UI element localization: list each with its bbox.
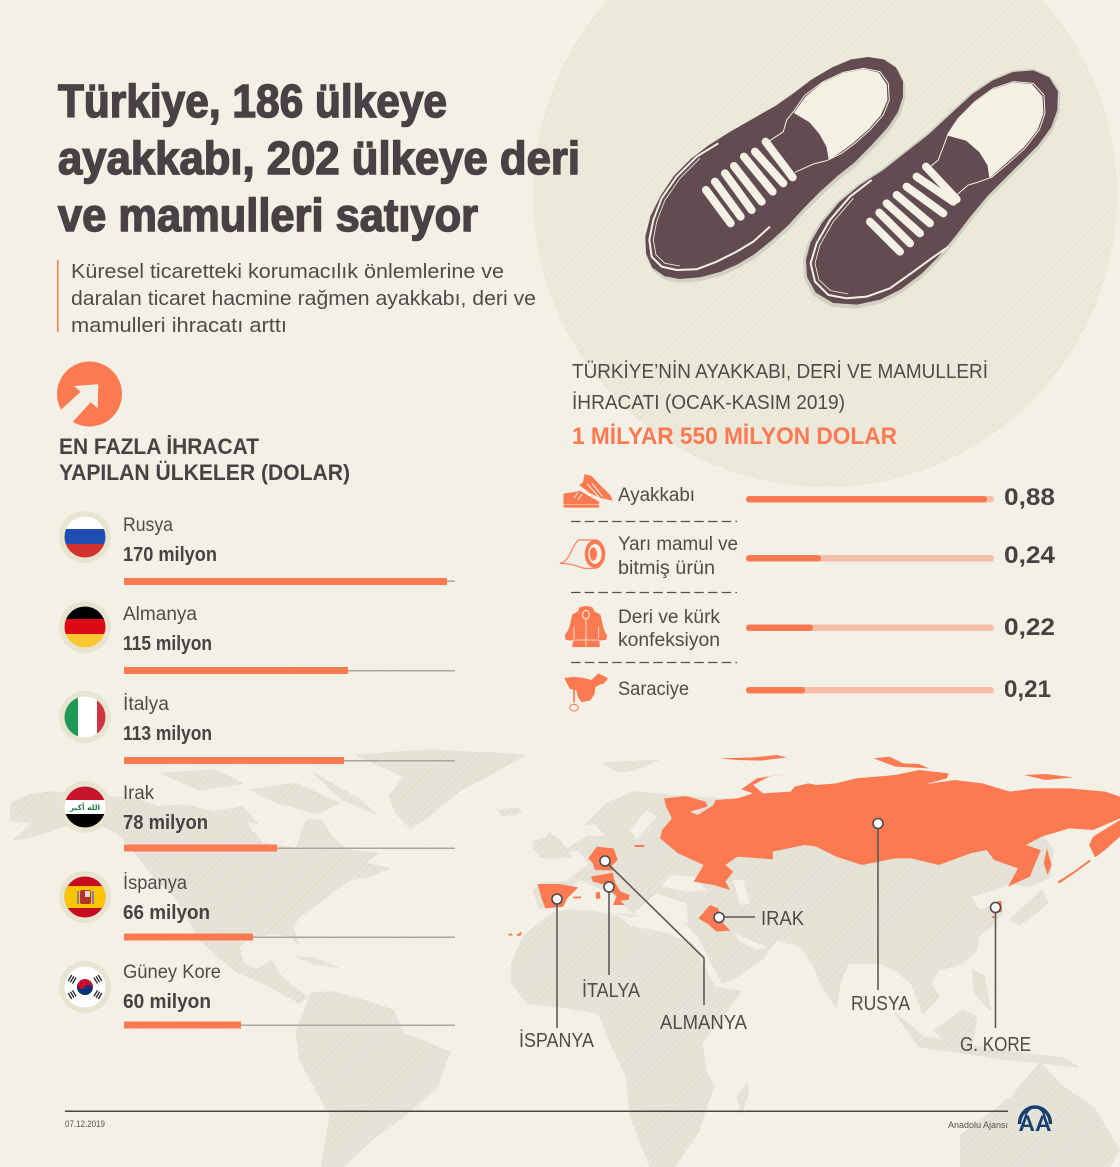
illustration: pair of shoes xyxy=(647,58,1057,305)
footer xyxy=(65,1110,1008,1130)
flag: Iraq: الله أكبر xyxy=(69,802,100,812)
divider xyxy=(571,520,737,522)
row: leather and fur apparel: konfeksiyon xyxy=(618,630,720,651)
row: leather and fur apparel: Deri ve kürk xyxy=(618,607,720,628)
country row: Germany: Almanya xyxy=(123,604,197,625)
row: footwear xyxy=(563,475,1055,511)
row: semi-finished: Yarı mamul ve xyxy=(618,534,738,555)
callout: Spain: İSPANYA xyxy=(519,1029,595,1052)
flag: Russia xyxy=(59,511,111,563)
callout: South Korea xyxy=(960,902,1031,1056)
title: Türkiye, 186 ülkeye xyxy=(58,75,447,127)
callout: Russia: RUSYA xyxy=(851,993,911,1015)
title: ayakkabı, 202 ülkeye deri xyxy=(58,132,580,184)
icon: jacket xyxy=(565,606,607,647)
South Korea xyxy=(992,901,1002,918)
subtitle: mamulleri ihracatı arttı xyxy=(71,315,287,337)
icon: saddle xyxy=(565,674,607,711)
flag: Iraq xyxy=(64,781,108,833)
logo: Anadolu Agency: AA xyxy=(1018,1111,1052,1136)
footer: Anadolu Ajansı xyxy=(948,1120,1008,1130)
country row: South Korea xyxy=(59,961,455,1028)
country row: Germany: 115 milyon xyxy=(123,633,212,655)
icon: shoes xyxy=(563,475,612,508)
row: saddlery xyxy=(565,674,1051,711)
callout: Iraq: IRAK xyxy=(761,908,805,930)
flag: Spain xyxy=(59,871,111,923)
Italy xyxy=(591,873,630,905)
country row: Iraq xyxy=(59,781,455,852)
divider xyxy=(571,662,737,664)
country row: Italy: 113 milyon xyxy=(123,723,212,745)
country row: Russia: 170 milyon xyxy=(123,544,217,566)
subtitle: Küresel ticaretteki korumacılık önlemlerine ve xyxy=(71,261,504,283)
row: semi-finished: bitmiş ürün xyxy=(618,558,715,579)
country row: Russia: Rusya xyxy=(123,515,173,536)
heading: top export countries xyxy=(59,434,350,485)
row: leather and fur apparel: 0,22 xyxy=(1004,614,1055,641)
callout: Germany xyxy=(600,856,748,1034)
world map background xyxy=(11,750,1120,1167)
row: saddlery: Saraciye xyxy=(618,679,689,700)
flag: Germany xyxy=(59,601,111,653)
row: saddlery: 0,21 xyxy=(1004,676,1051,703)
callout: Russia xyxy=(851,818,911,1015)
left shoe xyxy=(647,58,903,280)
map: highlighted countries xyxy=(508,755,1120,936)
Canary islands xyxy=(508,932,522,936)
Spain xyxy=(538,884,581,908)
icon: orange circle with arrow xyxy=(57,362,122,426)
heading: export total: 1 MİLYAR 550 MİLYON DOLAR xyxy=(572,423,897,450)
map callouts xyxy=(519,818,1031,1056)
row: semi-finished: 0,24 xyxy=(1004,542,1056,569)
callout: Italy: İTALYA xyxy=(582,979,641,1002)
country row: Italy xyxy=(59,691,455,764)
row: footwear: 0,88 xyxy=(1004,484,1055,511)
callout: South Korea: G. KORE xyxy=(960,1034,1031,1056)
heading: top export countries: EN FAZLA İHRACAT xyxy=(59,434,260,459)
right shoe xyxy=(807,72,1057,305)
heading: top export countries: YAPILAN ÜLKELER (DOLAR) xyxy=(59,460,350,485)
callout: Italy xyxy=(582,882,641,1002)
decorative circle behind shoes xyxy=(533,0,1117,487)
row: leather and fur apparel xyxy=(565,606,1055,651)
country row: South Korea: Güney Kore xyxy=(123,962,221,983)
subtitle xyxy=(57,260,536,337)
country row: Iraq: 78 milyon xyxy=(123,812,208,834)
heading: export total: İHRACATI (OCAK-KASIM 2019) xyxy=(572,391,845,414)
divider xyxy=(571,592,737,594)
flag: Italy xyxy=(59,691,111,743)
callout: Spain xyxy=(519,894,595,1052)
country row: Italy: İtalya xyxy=(123,694,169,715)
country row: Russia xyxy=(59,511,455,585)
callout: Germany: ALMANYA xyxy=(660,1012,748,1034)
title: ve mamulleri satıyor xyxy=(58,189,478,241)
title xyxy=(58,75,580,241)
country row: Spain: 66 milyon xyxy=(123,902,210,924)
country row: Spain: İspanya xyxy=(123,873,187,894)
icon: leather roll xyxy=(560,540,605,568)
country row: Germany xyxy=(59,601,455,674)
flag: South Korea xyxy=(59,961,111,1013)
heading: export total xyxy=(572,360,988,450)
Germany xyxy=(588,847,618,871)
country row: South Korea: 60 milyon xyxy=(123,991,211,1013)
heading: export total: TÜRKİYE’NİN AYAKKABI, DERİ VE MAMULLERİ xyxy=(572,360,988,383)
row: footwear: Ayakkabı xyxy=(618,485,695,506)
Russia xyxy=(634,755,1120,890)
callout: Iraq xyxy=(714,908,805,930)
country row: Spain xyxy=(59,871,455,940)
subtitle: daralan ticaret hacmine rağmen ayakkabı, deri ve xyxy=(71,288,536,310)
Iraq xyxy=(698,905,731,932)
country row: Iraq: Irak xyxy=(123,783,154,804)
footer: 07.12.2019 xyxy=(65,1119,105,1129)
row: semi-finished xyxy=(560,534,1056,579)
